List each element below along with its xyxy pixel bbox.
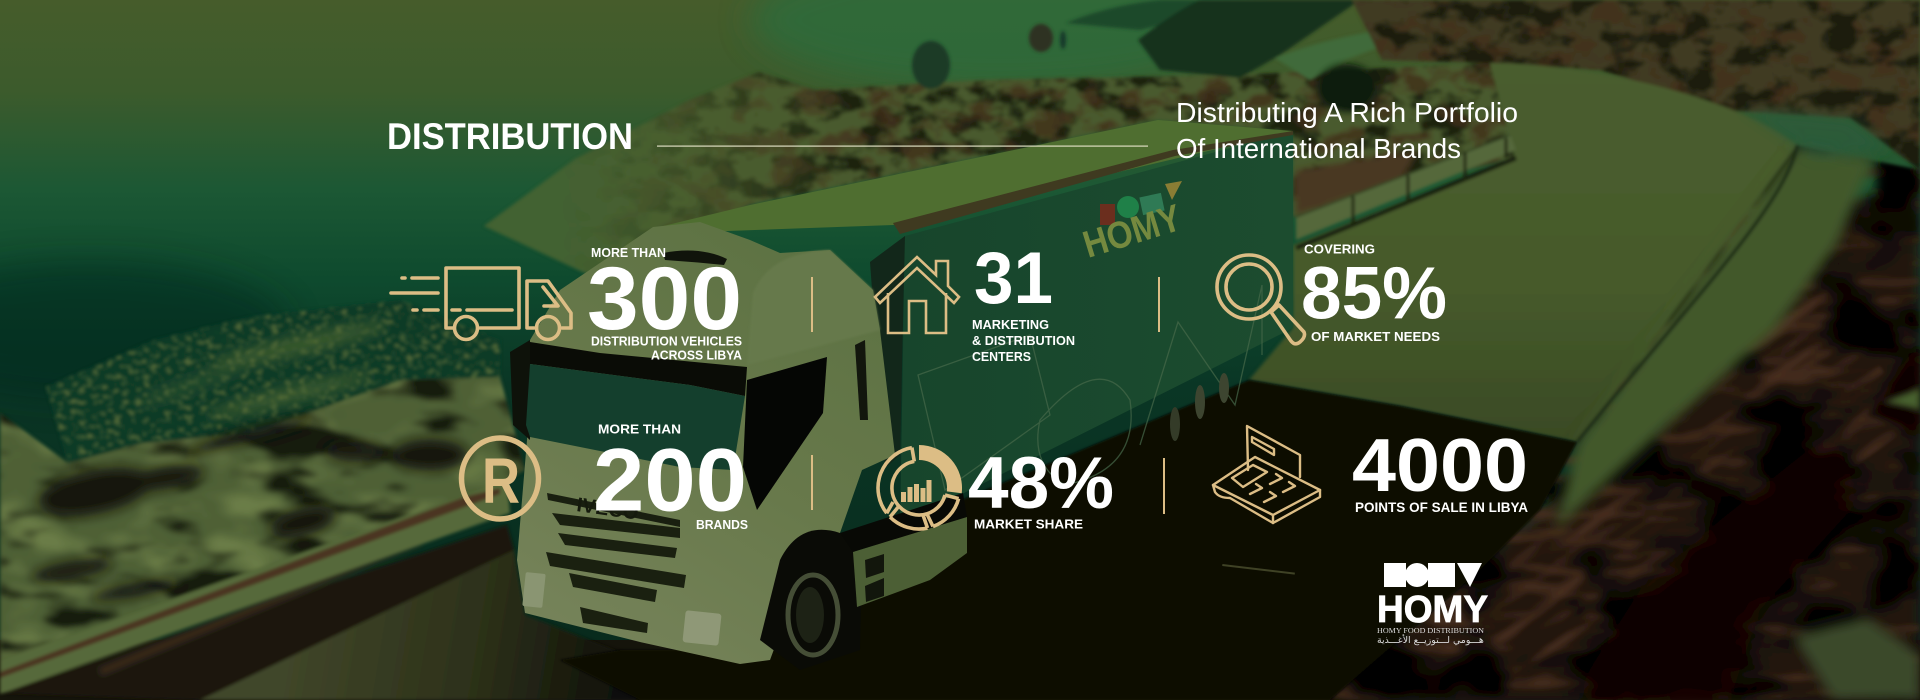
label: distribution vehicles	[591, 334, 743, 362]
icon: point of sale terminal	[1213, 426, 1320, 523]
stat: 300 distribution vehicles	[391, 245, 743, 362]
stat: 31 centers	[875, 238, 1075, 364]
label: distribution vehicles: DISTRIBUTION VEHICLES	[591, 334, 742, 348]
truck cab: IVECO	[575, 494, 640, 525]
label: covering: COVERING	[1304, 242, 1375, 256]
label: of market needs: OF MARKET NEEDS	[1311, 329, 1440, 344]
icon: house	[875, 257, 959, 333]
icon: registered mark: R	[482, 445, 520, 517]
number: 300: 300	[587, 248, 742, 348]
logo arabic tagline: هـــومي لـــتوزيــع الأغـــذية	[1377, 634, 1484, 646]
label: marketing and distribution centers: CENTERS	[972, 349, 1031, 364]
subtitle: Distributing A Rich Portfolio	[1176, 97, 1518, 128]
icon: magnifier	[1217, 255, 1304, 344]
label: marketing and distribution centers	[972, 317, 1075, 364]
number: 48%: 48%	[968, 443, 1114, 524]
divider 2	[1158, 277, 1160, 332]
number: 200: 200	[593, 430, 747, 530]
stat: 85% market needs	[1217, 242, 1447, 344]
stat: 4000 points of sale	[1213, 423, 1528, 523]
icon: delivery truck	[391, 268, 571, 340]
truck cab	[510, 222, 967, 670]
number: 85%: 85%	[1301, 252, 1447, 334]
icon: donut chart	[878, 445, 962, 529]
truck trailer	[655, 120, 1293, 525]
divider 3	[811, 455, 813, 510]
label: brands: BRANDS	[696, 517, 748, 532]
subtitle	[1176, 97, 1518, 164]
truck trailer: HOMY	[1078, 197, 1186, 267]
header row	[387, 97, 1518, 164]
logo mark	[1384, 563, 1482, 587]
subtitle: Of International Brands	[1176, 133, 1461, 164]
label: marketing and distribution centers: & DISTRIBUTION	[972, 333, 1075, 348]
heading: distribution: DISTRIBUTION	[387, 116, 633, 157]
stat: 200 brands	[462, 422, 748, 532]
label: market share: MARKET SHARE	[974, 516, 1083, 532]
number: 4000: 4000	[1352, 423, 1528, 507]
logo tagline: HOMY FOOD DISTRIBUTION	[1377, 626, 1485, 635]
divider 4	[1163, 458, 1165, 514]
number: 31: 31	[974, 238, 1053, 319]
label: points of sale: POINTS OF SALE IN LIBYA	[1355, 499, 1528, 515]
label: marketing and distribution centers: MARKETING	[972, 317, 1049, 332]
divider 1	[811, 277, 813, 332]
logo: Homy	[1377, 563, 1488, 646]
label: more than: MORE THAN	[591, 245, 666, 260]
heading rule	[657, 146, 1148, 147]
icon: registered mark	[462, 438, 538, 519]
logo wordmark: HOMY	[1377, 589, 1488, 631]
stat: 48% market share	[878, 443, 1114, 532]
label: more than: MORE THAN	[598, 422, 681, 436]
label: distribution vehicles: ACROSS LIBYA	[651, 348, 743, 362]
